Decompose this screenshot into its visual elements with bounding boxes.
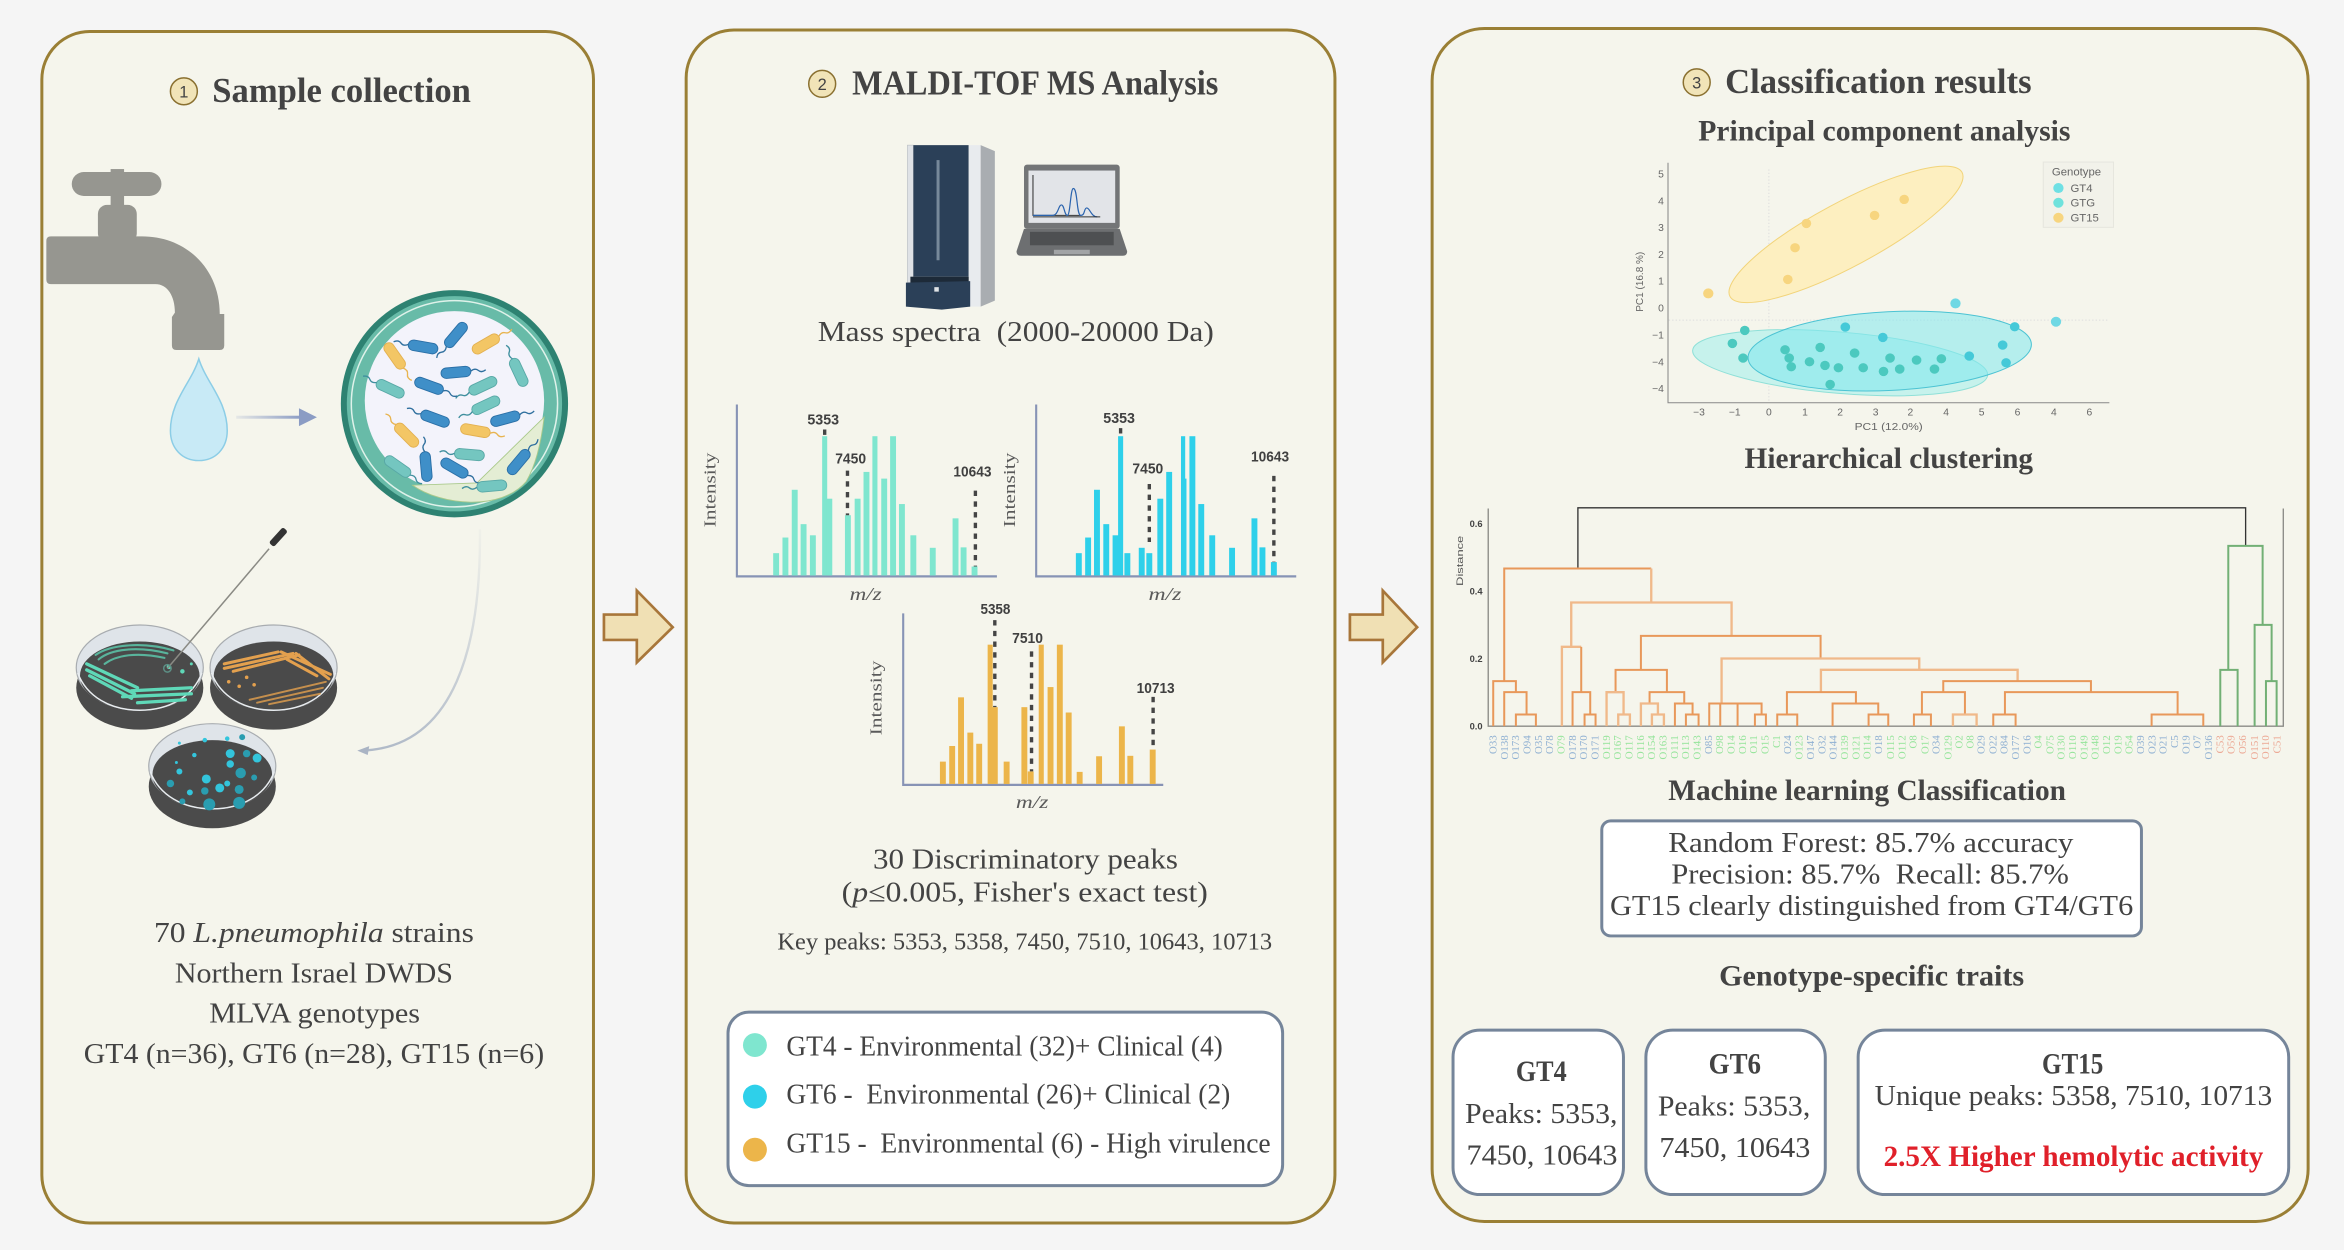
- text block: sample description: MLVA genotypes: [209, 999, 420, 1030]
- panel: classification results: [1432, 29, 2308, 1221]
- chart: dendrogram: 0.2: [1470, 654, 1483, 664]
- chart: GT15 spectrum: 10713: [1137, 681, 1175, 697]
- dendrogram leaf labels: O17: [1919, 735, 1931, 754]
- dendrogram leaf labels: O2: [1954, 735, 1966, 749]
- callout: random forest metrics: GT15 clearly distinguished from GT4/GT6: [1610, 891, 2133, 922]
- dendrogram leaf labels: O14: [1726, 735, 1738, 754]
- text block: sample description: 70 L.pneumophila strains: [154, 918, 474, 949]
- dendrogram leaf labels: O39: [2135, 735, 2147, 754]
- dendrogram leaf labels: O139: [1839, 735, 1851, 760]
- chart: PCA scatter: 1: [1802, 408, 1808, 418]
- chart: GT15 spectrum: Intensity: [867, 660, 886, 735]
- dendrogram leaf labels: O114: [1862, 735, 1874, 759]
- dendrogram leaf labels: O19: [2180, 735, 2192, 754]
- dendrogram leaf labels: O115: [1885, 735, 1897, 759]
- arrow: step 1 to step 2: [604, 591, 673, 662]
- dendrogram leaf labels: O34: [1931, 735, 1943, 754]
- chart: GT6 spectrum: [1000, 405, 1296, 604]
- legend: PCA genotype: GTG: [2070, 198, 2095, 210]
- dendrogram leaf labels: O147: [1805, 735, 1817, 760]
- dendrogram leaf labels: O130: [2056, 735, 2068, 760]
- chart: PCA scatter: 3: [1658, 223, 1664, 234]
- chart: PCA scatter: 4: [1658, 197, 1664, 207]
- dendrogram leaf labels: C5: [2169, 735, 2181, 748]
- dendrogram leaf labels: O18: [1873, 735, 1885, 754]
- icon: culture dishes: [76, 527, 337, 828]
- panel: MALDI-TOF analysis: [686, 30, 1335, 1223]
- panel: sample collection: [42, 32, 593, 1223]
- icon: inoculation loop: [164, 527, 288, 672]
- dendrogram leaf labels: O24: [1782, 735, 1794, 754]
- dendrogram leaf labels: O136: [2203, 735, 2215, 760]
- dendrogram leaf labels: O110: [2067, 735, 2079, 759]
- text block: sample description: [84, 918, 544, 1070]
- card: GT6: 7450, 10643: [1659, 1133, 1810, 1164]
- chart: PCA scatter: [1635, 144, 2113, 433]
- callout: random forest metrics: [1602, 821, 2141, 936]
- step badge 1: 1: [179, 83, 188, 101]
- chart: PCA scatter: 2: [1658, 250, 1664, 261]
- chart: GT4 spectrum: 7450: [835, 451, 866, 468]
- dendrogram leaf labels: O8: [1964, 735, 1976, 749]
- dendrogram leaf labels: [1488, 735, 2283, 760]
- card: GT15: 2.5X Higher hemolytic activity: [1884, 1140, 2263, 1173]
- heading: sample collection: Sample collection: [212, 72, 471, 110]
- dendrogram leaf labels: O23: [2146, 735, 2158, 754]
- dendrogram leaf labels: O110: [2260, 735, 2272, 759]
- chart: PCA scatter: −1: [1729, 408, 1741, 418]
- chart: PCA scatter: 6: [2015, 408, 2021, 418]
- legend: genotypes: GT4 - Environmental (32)+ Clinical (4): [786, 1032, 1223, 1063]
- card: GT4: GT4: [1516, 1055, 1567, 1088]
- label: mass spectra range: Mass spectra (2000-20000 Da): [818, 317, 1214, 348]
- chart: GT6 spectrum: m/z: [1148, 585, 1182, 604]
- dendrogram leaf labels: O144: [1828, 735, 1840, 760]
- dendrogram leaf labels: O85: [1703, 735, 1715, 754]
- dendrogram leaf labels: O78: [1544, 735, 1556, 754]
- chart: PCA scatter: −3: [1693, 408, 1705, 418]
- dendrogram leaf labels: O154: [1646, 735, 1658, 760]
- icon: water drop: [170, 359, 227, 461]
- dendrogram leaf labels: O56: [2237, 735, 2249, 754]
- dendrogram leaf labels: O148: [2090, 735, 2102, 760]
- dendrogram leaf labels: O177: [2010, 735, 2022, 760]
- card: GT4: Peaks: 5353,: [1465, 1099, 1617, 1130]
- dendrogram leaf labels: O138: [1499, 735, 1511, 760]
- text block: discriminatory peaks: [777, 845, 1272, 955]
- dendrogram leaf labels: O143: [1692, 735, 1704, 760]
- step badge 2: [809, 70, 836, 97]
- chart: PCA scatter: −1: [1652, 331, 1664, 342]
- chart: PCA scatter: 2: [1908, 408, 1914, 418]
- chart: GT4 spectrum: 5353: [807, 412, 839, 429]
- chart: PCA scatter: PC1 (12.0%): [1855, 422, 1923, 433]
- dendrogram leaf labels: O21: [2158, 735, 2170, 754]
- icon: laptop: [1017, 165, 1127, 256]
- arrow: biofilm to culture: [357, 529, 480, 755]
- dendrogram leaf labels: O163: [1658, 735, 1670, 760]
- dendrogram leaf labels: O149: [2078, 735, 2090, 760]
- legend: PCA genotype: Genotype: [2052, 167, 2101, 179]
- dendrogram leaf labels: O59: [2226, 735, 2238, 754]
- chart: GT4 spectrum: [701, 405, 997, 604]
- card: GT15: Unique peaks: 5358, 7510, 10713: [1875, 1081, 2272, 1112]
- dendrogram leaf labels: O4: [2033, 735, 2045, 749]
- text block: sample description: GT4 (n=36), GT6 (n=28), GT15 (n=6): [84, 1039, 544, 1070]
- icon: tap: [46, 169, 224, 350]
- dendrogram leaf labels: O11: [1748, 735, 1760, 754]
- chart: dendrogram: 0.6: [1470, 519, 1483, 529]
- dendrogram leaf labels: O117: [1624, 735, 1636, 759]
- dendrogram leaf labels: O35: [1533, 735, 1545, 754]
- dendrogram leaf labels: O75: [2044, 735, 2056, 754]
- dendrogram leaf labels: O79: [1556, 735, 1568, 754]
- chart: PCA scatter: 5: [1979, 408, 1985, 418]
- chart: GT6 spectrum: 5353: [1103, 410, 1135, 427]
- dendrogram leaf labels: C1: [1771, 735, 1783, 748]
- heading: machine learning: Machine learning Classification: [1668, 774, 2066, 807]
- dendrogram leaf labels: O16: [2021, 735, 2033, 754]
- legend: genotypes: GT15 - Environmental (6) - High virulence: [786, 1129, 1271, 1160]
- callout: random forest metrics: Precision: 85.7% Recall: 85.7%: [1671, 860, 2069, 891]
- arrow: step 2 to step 3: [1350, 591, 1417, 662]
- legend: PCA genotype: GT4: [2070, 183, 2093, 195]
- legend: PCA genotype: GT15: [2070, 213, 2099, 225]
- step badge 1: [170, 78, 197, 105]
- dendrogram leaf labels: O22: [1987, 735, 1999, 754]
- heading: MALDI-TOF: MALDI-TOF MS Analysis: [852, 64, 1218, 102]
- dendrogram leaf labels: O32: [1816, 735, 1828, 754]
- dendrogram leaf labels: O54: [2124, 735, 2136, 754]
- dendrogram leaf labels: O98: [1714, 735, 1726, 754]
- dendrogram leaf labels: O94: [1522, 735, 1534, 754]
- dendrogram leaf labels: O112: [1897, 735, 1909, 759]
- chart: GT4 spectrum: Intensity: [701, 452, 719, 527]
- chart: PCA scatter: 0: [1766, 408, 1772, 418]
- dendrogram leaf labels: C53: [2214, 735, 2226, 754]
- dendrogram leaf labels: O15: [1760, 735, 1772, 754]
- text block: sample description: Northern Israel DWDS: [175, 958, 453, 989]
- chart: dendrogram: [1455, 508, 2283, 760]
- chart: dendrogram: 0.4: [1470, 587, 1483, 597]
- chart: GT6 spectrum: 7450: [1132, 461, 1163, 478]
- chart: PCA scatter: −4: [1652, 384, 1664, 395]
- icon: mass spectrometer: [906, 145, 995, 310]
- step badge 3: [1683, 69, 1710, 96]
- chart: GT15 spectrum: m/z: [1016, 793, 1049, 812]
- chart: GT6 spectrum: Intensity: [1000, 452, 1019, 527]
- chart: PCA scatter: 4: [2051, 408, 2057, 418]
- card: GT6: Peaks: 5353,: [1658, 1091, 1810, 1122]
- arrow: drop to biofilm: [236, 408, 317, 426]
- dendrogram leaf labels: O151: [2249, 735, 2261, 760]
- dendrogram leaf labels: O19: [2112, 735, 2124, 754]
- dendrogram leaf labels: O8: [1908, 735, 1920, 749]
- dendrogram leaf labels: O7: [2192, 735, 2204, 749]
- chart: PCA scatter: 4: [1943, 408, 1949, 418]
- chart: GT15 spectrum: [867, 602, 1175, 812]
- chart: PCA scatter: PC1 (16.8 %): [1635, 252, 1646, 312]
- card: GT6: GT6: [1709, 1047, 1761, 1080]
- card: GT4: [1453, 1030, 1623, 1195]
- legend: genotypes: GT6 - Environmental (26)+ Clinical (2): [786, 1079, 1230, 1110]
- dendrogram leaf labels: O129: [1942, 735, 1954, 760]
- callout: random forest metrics: Random Forest: 85.7% accuracy: [1668, 828, 2074, 859]
- chart: GT4 spectrum: m/z: [850, 585, 882, 604]
- legend: genotypes: [728, 1012, 1283, 1186]
- dendrogram leaf labels: O171: [1590, 735, 1602, 760]
- legend: PCA genotype: [2043, 162, 2113, 227]
- dendrogram leaf labels: O84: [1999, 735, 2011, 754]
- chart: GT15 spectrum: 5358: [980, 602, 1010, 618]
- chart: PCA scatter: −4: [1652, 358, 1664, 368]
- card: GT15: [1858, 1030, 2289, 1195]
- chart: PCA scatter: 1: [1658, 277, 1664, 288]
- heading: PCA: Principal component analysis: [1698, 115, 2070, 148]
- chart: PCA scatter: 5: [1658, 170, 1664, 180]
- chart: PCA scatter: 6: [2087, 408, 2093, 418]
- chart: PCA scatter: 0: [1658, 304, 1664, 315]
- dendrogram leaf labels: O33: [1488, 735, 1500, 754]
- chart: PCA scatter: 2: [1837, 408, 1843, 418]
- heading: hierarchical clustering: Hierarchical clustering: [1745, 442, 2033, 475]
- dendrogram leaf labels: O12: [2101, 735, 2113, 754]
- dendrogram leaf labels: O119: [1601, 735, 1613, 759]
- chart: dendrogram: Distance: [1455, 536, 1465, 586]
- card: GT15: GT15: [2042, 1047, 2103, 1080]
- step badge 2: 2: [818, 76, 827, 94]
- chart: dendrogram: 0.0: [1470, 722, 1483, 732]
- chart: GT6 spectrum: 10643: [1251, 449, 1289, 466]
- dendrogram leaf labels: O121: [1850, 735, 1862, 760]
- dendrogram leaf labels: O113: [1680, 735, 1692, 759]
- text block: discriminatory peaks: Key peaks: 5353, 5358, 7450, 7510, 10643, 10713: [777, 929, 1272, 955]
- dendrogram leaf labels: O16: [1737, 735, 1749, 754]
- spectra charts: [701, 405, 1296, 812]
- dendrogram leaf labels: O111: [1669, 735, 1681, 759]
- heading: genotype traits: Genotype-specific traits: [1719, 959, 2024, 992]
- step badge 3: 3: [1692, 74, 1701, 92]
- text block: discriminatory peaks: 30 Discriminatory peaks: [873, 845, 1178, 876]
- chart: GT4 spectrum: 10643: [953, 464, 991, 480]
- dendrogram leaf labels: O123: [1794, 735, 1806, 760]
- dendrogram leaf labels: O170: [1578, 735, 1590, 760]
- dendrogram leaf labels: C51: [2271, 735, 2283, 754]
- card: GT6: [1646, 1030, 1825, 1195]
- dendrogram leaf labels: O167: [1612, 735, 1624, 760]
- text block: discriminatory peaks: (p≤0.005, Fisher's exact test): [842, 878, 1208, 909]
- card: GT4: 7450, 10643: [1466, 1141, 1617, 1172]
- dendrogram leaf labels: O29: [1976, 735, 1988, 754]
- dendrogram leaf labels: O178: [1567, 735, 1579, 760]
- chart: PCA scatter: 3: [1873, 408, 1879, 418]
- dendrogram leaf labels: O116: [1635, 735, 1647, 759]
- heading: classification results: Classification results: [1725, 63, 2032, 101]
- icon: magnified bacteria: [341, 290, 568, 517]
- chart: GT15 spectrum: 7510: [1012, 631, 1043, 647]
- dendrogram leaf labels: O173: [1510, 735, 1522, 760]
